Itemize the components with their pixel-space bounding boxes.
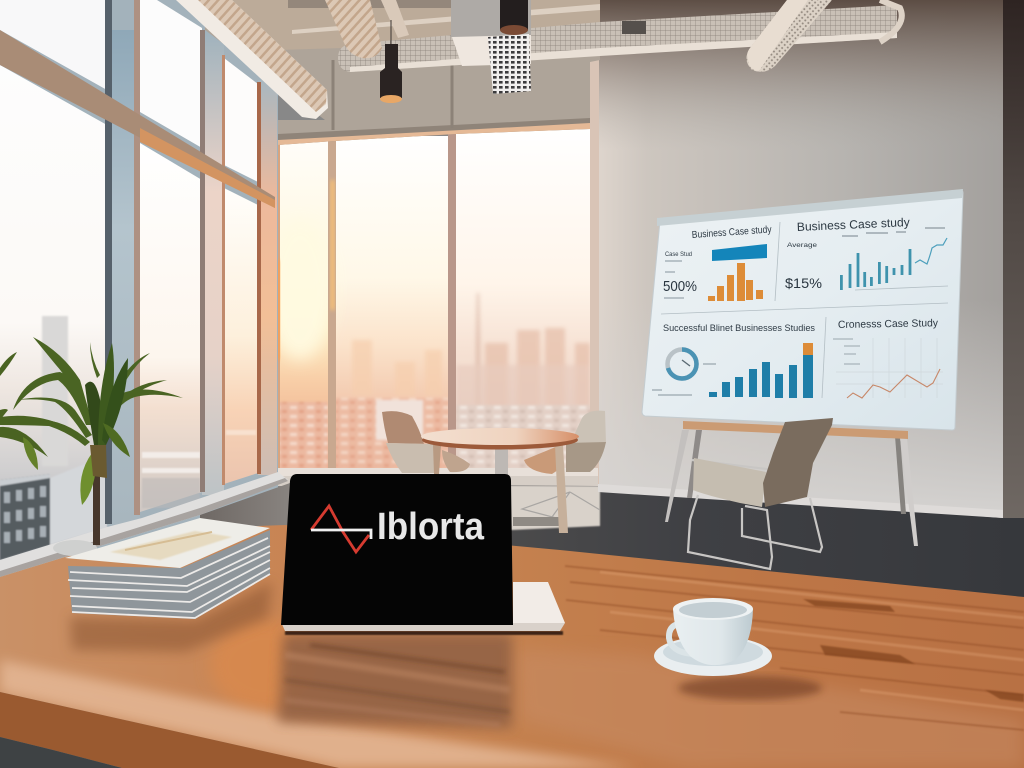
ceiling ducts [176,0,902,119]
legend lines [833,339,860,364]
hazy skyline right [456,293,590,430]
panel: top left [663,224,772,301]
cup body [673,609,753,665]
office chair [688,418,833,569]
bright lower leaf [80,453,97,505]
small legend [652,364,716,395]
heading: Successful Blinet Businesses Studies [663,323,815,334]
laptop lid [281,474,513,625]
right highlight [515,650,1024,768]
front right leg [900,438,918,546]
cup handle [669,623,692,654]
table shading [0,620,1024,768]
baseboard [598,484,1003,518]
cover artwork [110,531,232,560]
wood grain [565,566,1024,730]
ceiling [205,0,600,134]
window mullions [275,60,599,486]
long mesh duct [338,5,897,72]
small caption lines [664,261,684,298]
cup rim [673,598,753,620]
lower leaves [103,423,130,457]
grid lines [836,338,943,398]
left plant leaves [0,352,68,470]
plant stem [93,470,100,545]
sun glare [266,220,334,360]
saucer [654,636,772,676]
ceiling beam [381,0,409,38]
lower pane 1 [0,65,107,560]
tabletop [683,421,908,439]
standing whiteboard table [665,421,918,546]
right dark column [1003,0,1024,520]
speckled city lower [277,398,591,470]
top rail [657,189,963,226]
laptop reflection [278,631,563,728]
pendant lamp right [500,0,528,35]
chair frame [688,460,822,569]
panel: bottom right [833,317,943,398]
keyboard deck [513,582,565,623]
dark grain patches [803,599,1024,702]
window sill [0,472,288,577]
table front leg [555,445,568,533]
front highlight band [0,660,640,768]
floor bottom corner [0,737,122,768]
round table and chairs [382,411,606,533]
logo wordmark: Iblorta [377,506,485,548]
sunset glass pane [277,140,328,472]
back wall [598,0,1004,520]
right chair [524,411,606,474]
left chair [382,411,470,473]
upper panes [0,0,107,90]
ribbed pipe [746,0,832,72]
duct hook [880,0,902,42]
table top [421,428,579,450]
label: Case Stud [665,251,692,258]
lower pane 2 [140,143,202,512]
heading: Cronesss Case Study [838,317,939,331]
magazine stack [65,518,270,619]
left window wall [0,0,288,578]
wall lower shading [598,300,1004,520]
coffee cup and saucer [654,598,772,676]
hazy skyline center [352,340,442,395]
blue button [712,244,767,261]
cup interior [679,602,747,618]
blue city buildings [0,316,256,560]
floor light reflection near window [290,484,600,530]
panel: bottom left [652,323,815,398]
table front edge [0,692,339,768]
diagonal transom [0,30,275,208]
wall upper shading [598,0,1004,150]
stack side [68,530,270,619]
label: Average [787,242,817,249]
center pane [335,136,449,472]
long leaves [13,337,183,446]
trend line [915,238,947,264]
page lines [68,538,270,618]
back windows [266,60,599,486]
table left leg [433,445,441,474]
grille panel [488,34,531,94]
pot saucer [53,540,97,556]
line chart [847,369,940,398]
plant [0,337,183,556]
warm glow [210,620,320,710]
panel: top right [785,215,947,291]
pendant lamp left [380,20,402,103]
top magazine [65,518,270,568]
floor [200,483,1024,600]
percent stat: $15% [785,276,822,291]
table base bar [513,517,563,526]
stack shadow [70,582,272,652]
wall panel lines [333,56,452,130]
whiteboard [642,189,963,430]
chair star base [522,492,600,519]
chair seat [693,458,766,507]
pipe light side [747,0,808,71]
center leaf cluster [85,343,128,445]
wall vent [622,21,646,34]
dividers [661,222,948,398]
laptop [281,474,565,631]
blue bar chart [709,355,813,398]
light grain [600,572,1024,710]
rear legs [687,430,702,498]
right pane [456,129,591,472]
front left leg [665,430,689,522]
vent box [451,0,531,66]
orange bar chart [708,263,763,301]
logo wave [311,506,371,552]
laptop base [281,622,565,631]
brown stalk sheath [90,445,107,478]
donut chart [668,350,696,379]
table pedestal [495,445,508,480]
orange bar cap [803,343,813,355]
percent stat: 500% [663,279,697,295]
teal bar chart [840,249,911,290]
wooden table [0,525,1024,768]
transom warm edge [140,128,275,208]
cup shadow [678,676,822,700]
column and frame details [105,0,277,525]
heading: Business Case study [797,215,910,234]
chair back [763,418,833,507]
lower pane 3 [224,188,258,484]
diagonal ribbed duct [325,0,382,58]
heading: Business Case study [691,224,772,241]
left ribbed duct [176,0,328,119]
legend lines [842,228,945,236]
